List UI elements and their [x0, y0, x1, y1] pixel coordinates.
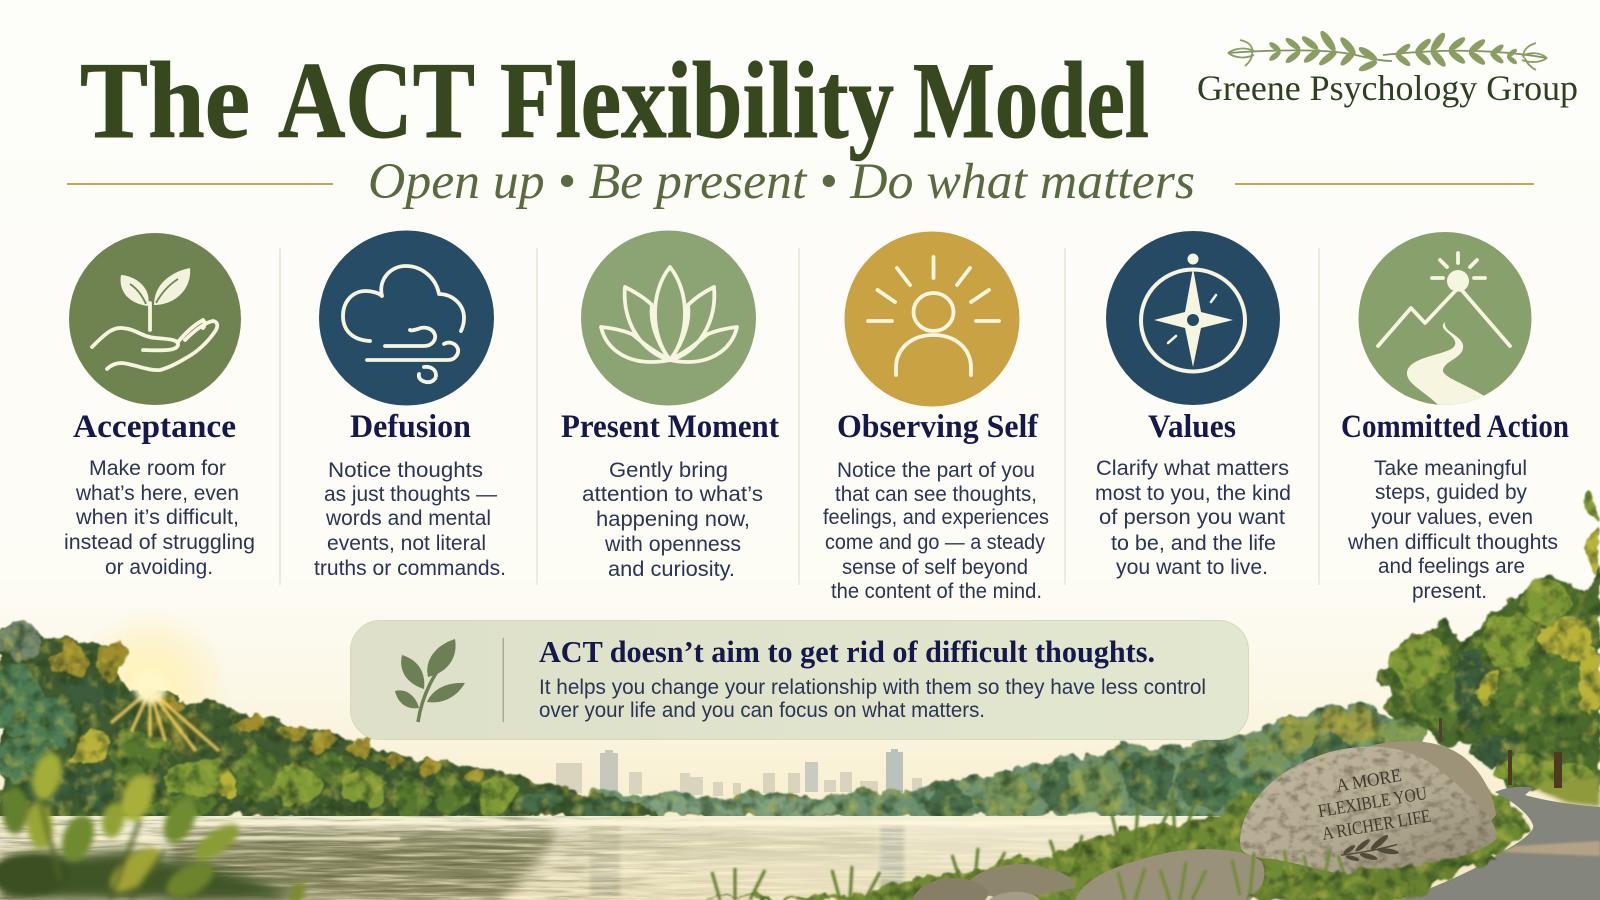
description: Gently bring	[609, 458, 728, 482]
logo: Greene Psychology Group	[1197, 29, 1578, 108]
grassy bank	[690, 790, 1533, 900]
description: when difficult thoughts	[1347, 530, 1558, 554]
callout body: It helps you change your relationship with them so they have less control	[539, 675, 1206, 699]
title: Model	[913, 40, 1149, 161]
background: lakeside landscape	[0, 489, 1600, 900]
title	[80, 40, 1149, 161]
heading: Acceptance	[73, 409, 236, 445]
description	[1347, 456, 1558, 603]
description: Make room for	[89, 456, 226, 480]
subtitle with rules: Open up • Be present • Do what matters	[368, 154, 1195, 210]
description: sense of self beyond	[842, 555, 1028, 579]
boulder inscription: FLEXIBLE YOU	[1317, 784, 1429, 822]
heading: Present Moment	[561, 409, 779, 445]
icon: lotus	[581, 230, 756, 406]
lake	[0, 816, 1300, 900]
far treeline	[540, 705, 1420, 818]
description: Notice thoughts	[328, 458, 483, 482]
column: Acceptance	[64, 233, 255, 579]
column: Values	[1095, 231, 1291, 579]
callout heading: ACT doesn’t aim to get rid of difficult thoughts.	[539, 634, 1155, 669]
description: instead of struggling	[64, 530, 255, 554]
icon: compass	[1106, 231, 1280, 405]
icon: cloud and wind	[319, 230, 494, 406]
description: truths or commands.	[314, 556, 506, 580]
description: most to you, the kind	[1095, 481, 1291, 505]
logo: Greene Psychology Group: Greene Psychology Group	[1197, 68, 1578, 108]
walking path	[1400, 787, 1600, 900]
city skyline	[556, 749, 922, 796]
icon: leaf sprig	[395, 639, 465, 722]
description: as just thoughts —	[324, 482, 497, 506]
description: come and go — a steady	[825, 530, 1045, 554]
description: to be, and the life	[1111, 531, 1276, 555]
description: with openness	[604, 532, 741, 556]
boulder inscription: A MORE	[1335, 766, 1403, 797]
description: feelings, and experiences	[823, 505, 1049, 529]
right shoreline trees	[1380, 489, 1600, 807]
water glints	[50, 821, 1190, 840]
description	[64, 456, 255, 579]
column dividers	[280, 248, 1319, 585]
description: happening now,	[596, 507, 750, 531]
column: Committed Action	[1341, 232, 1569, 603]
icon: seedling in hand	[69, 233, 241, 405]
bushes behind path	[1495, 757, 1595, 787]
description: that can see thoughts,	[835, 482, 1037, 506]
logo sprig	[1228, 29, 1547, 73]
callout: ACT key message	[350, 620, 1248, 740]
sun glow	[70, 608, 230, 768]
description: Notice the part of you	[837, 458, 1035, 482]
boulders	[912, 735, 1505, 900]
heading: Defusion	[350, 409, 471, 445]
description: words and mental	[325, 506, 491, 530]
boulder inscription	[1313, 762, 1437, 870]
description: and feelings are	[1378, 554, 1525, 578]
icon: mountain, sun and path	[1358, 232, 1532, 410]
title: ACT	[278, 40, 475, 161]
left wooded hill	[0, 620, 660, 820]
sun rays	[112, 690, 218, 750]
description: or avoiding.	[105, 555, 213, 579]
description	[314, 458, 506, 580]
front grass over boulders	[1118, 850, 1345, 900]
description: and curiosity.	[608, 557, 735, 581]
foreground blurred leaves	[0, 749, 308, 900]
description: when it’s difficult,	[75, 505, 239, 529]
treeline details right of centre	[610, 709, 1421, 818]
description: present.	[1412, 579, 1487, 603]
title: Flexibility	[500, 40, 894, 161]
callout body	[539, 675, 1206, 722]
description: what’s here, even	[75, 481, 239, 505]
description	[582, 458, 763, 581]
icon: person with rays	[844, 232, 1020, 406]
title: The	[80, 40, 250, 161]
callout body: over your life and you can focus on what matters.	[539, 698, 985, 722]
description	[823, 458, 1049, 603]
description: steps, guided by	[1375, 480, 1527, 504]
heading: Observing Self	[837, 409, 1039, 445]
description: of person you want	[1099, 505, 1285, 529]
grass tufts	[712, 790, 1195, 900]
boulder inscription: A RICHER LIFE	[1321, 807, 1432, 845]
description: Take meaningful	[1374, 456, 1527, 480]
column: Defusion	[314, 230, 506, 580]
description: your values, even	[1371, 505, 1533, 529]
description: you want to live.	[1116, 555, 1268, 579]
description: events, not literal	[327, 531, 486, 555]
description: attention to what’s	[582, 482, 763, 506]
description: the content of the mind.	[831, 579, 1042, 603]
heading: Values	[1148, 409, 1236, 445]
heading: Committed Action	[1341, 409, 1569, 445]
column: Observing Self	[823, 232, 1049, 603]
boulder sprig	[1339, 831, 1400, 867]
description: Clarify what matters	[1096, 456, 1289, 480]
column: Present Moment	[561, 230, 779, 581]
description	[1095, 456, 1291, 579]
